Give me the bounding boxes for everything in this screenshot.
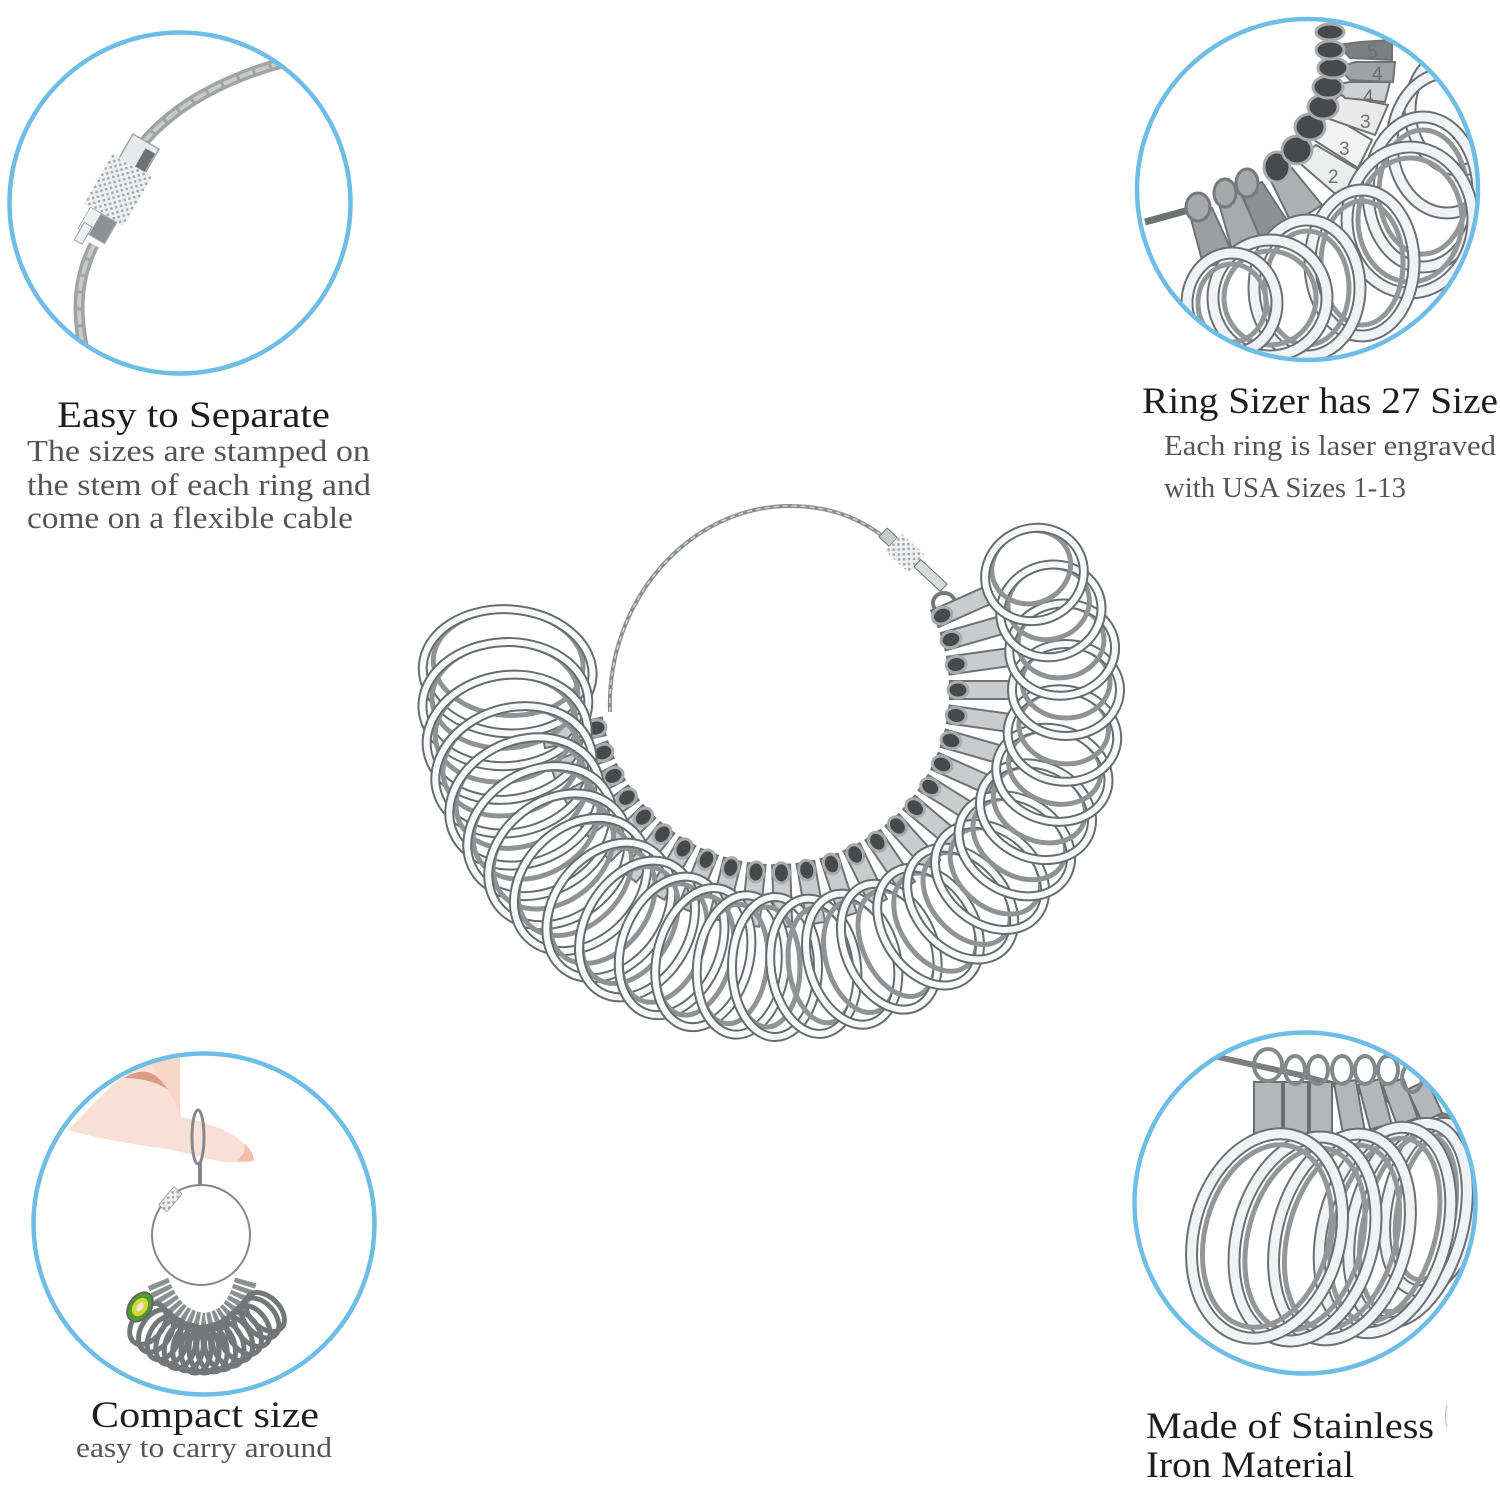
stems with engraved numbers [1190,40,1395,268]
heading: made of stainless iron material: Made of Stainless [1146,1406,1434,1447]
panel: material photo circle [1134,1032,1494,1374]
icon: wire clasp [875,524,951,597]
panel: compact size photo circle [34,1054,374,1394]
heading: ring sizer has 27 size: Ring Sizer has 27 Size [1142,381,1498,422]
mini ring stems [158,1280,246,1324]
cable through stems [1145,207,1200,222]
heading: compact size: Compact size [91,1395,319,1436]
heading: made of stainless iron material [1146,1406,1434,1486]
stems with engraved numbers: 4 [1363,87,1374,108]
connector loop [933,593,955,613]
large rings [1185,1116,1474,1348]
stems with engraved numbers: 3 [1360,112,1371,133]
text block: easy to carry around: easy to carry around [76,1433,332,1464]
heading: easy to separate: Easy to Separate [57,395,330,436]
text block: laser engraved description [1164,431,1496,504]
text block: separate description: the stem of each ring and [27,467,372,502]
stems with engraved numbers: 5 [1367,42,1378,63]
icon: finger [68,1058,254,1163]
text block: separate description [27,433,372,535]
central photo: ring sizer set [417,506,1124,1040]
stems with engraved numbers: 3 [1339,139,1350,160]
large rings [1187,50,1500,356]
ring stems [541,585,1012,927]
stem loops [1186,24,1348,221]
panel: easy to separate photo circle [10,32,350,374]
text block: laser engraved description: Each ring is laser engraved [1164,431,1496,462]
stem loops [1254,1049,1422,1092]
cable [1218,1057,1460,1120]
ring stems [1254,1078,1442,1136]
wire loop [610,506,888,712]
text block: laser engraved description: with USA Sizes 1-13 [1164,473,1406,504]
text block: separate description: The sizes are stamped on [27,433,371,468]
cable [79,62,285,350]
stems with engraved numbers: 2 [1328,167,1339,188]
mini rings [122,1285,292,1374]
icon: hanging ring and wire [152,1110,250,1285]
heading: made of stainless iron material: Iron Material [1146,1445,1354,1486]
stems with engraved numbers: 4 [1372,64,1383,85]
panel: 27 size photo circle [1137,19,1500,360]
text block: separate description: come on a flexible cable [27,500,353,535]
icon: green size tag [126,1291,154,1323]
icon: knurled clasp [74,133,160,245]
sizing rings [417,512,1124,1040]
